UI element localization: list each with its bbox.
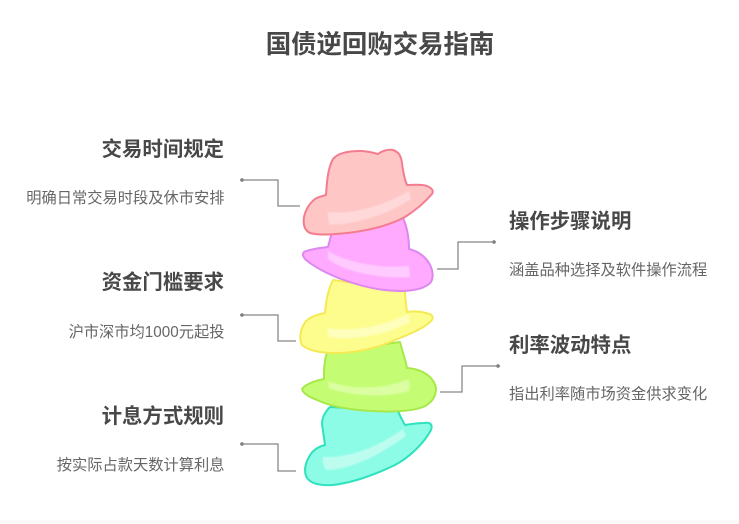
panel: 利率波动特点: 利率波动特点 <box>509 334 631 357</box>
hat stack <box>300 150 436 485</box>
panel: 资金门槛要求: 沪市深市均1000元起投 <box>69 324 224 341</box>
panel: 资金门槛要求 <box>69 270 296 341</box>
panel: 利率波动特点 <box>440 334 707 403</box>
panel: 交易时间规定: 明确日常交易时段及休市安排 <box>26 189 224 207</box>
panel: 操作步骤说明: 操作步骤说明 <box>509 210 631 233</box>
panel: 利率波动特点: 指出利率随市场资金供求变化 <box>509 386 707 403</box>
hat: teal <box>305 407 432 485</box>
highlight <box>328 379 410 395</box>
hat: pink <box>304 150 433 235</box>
panel: 操作步骤说明: 涵盖品种选择及软件操作流程 <box>509 262 707 279</box>
connector <box>240 442 296 471</box>
panel: 交易时间规定: 交易时间规定 <box>102 137 224 161</box>
hat: magenta <box>303 216 433 291</box>
hat: green <box>302 342 436 412</box>
panel: 计息方式规则 <box>57 404 296 474</box>
panel: 资金门槛要求: 资金门槛要求 <box>102 270 224 294</box>
panel: 计息方式规则: 计息方式规则 <box>102 404 224 428</box>
connector <box>437 240 496 269</box>
highlight <box>327 314 410 338</box>
connector <box>240 313 296 341</box>
highlight <box>323 429 406 470</box>
panel: 操作步骤说明 <box>437 210 707 279</box>
connector <box>440 364 500 392</box>
hat: yellow <box>300 280 433 353</box>
panel: 计息方式规则: 按实际占款天数计算利息 <box>57 456 224 474</box>
connector <box>240 178 300 206</box>
highlight <box>328 251 410 277</box>
highlight <box>328 191 411 225</box>
title: 国债逆回购交易指南 <box>266 31 494 59</box>
panel: 交易时间规定 <box>26 137 300 207</box>
